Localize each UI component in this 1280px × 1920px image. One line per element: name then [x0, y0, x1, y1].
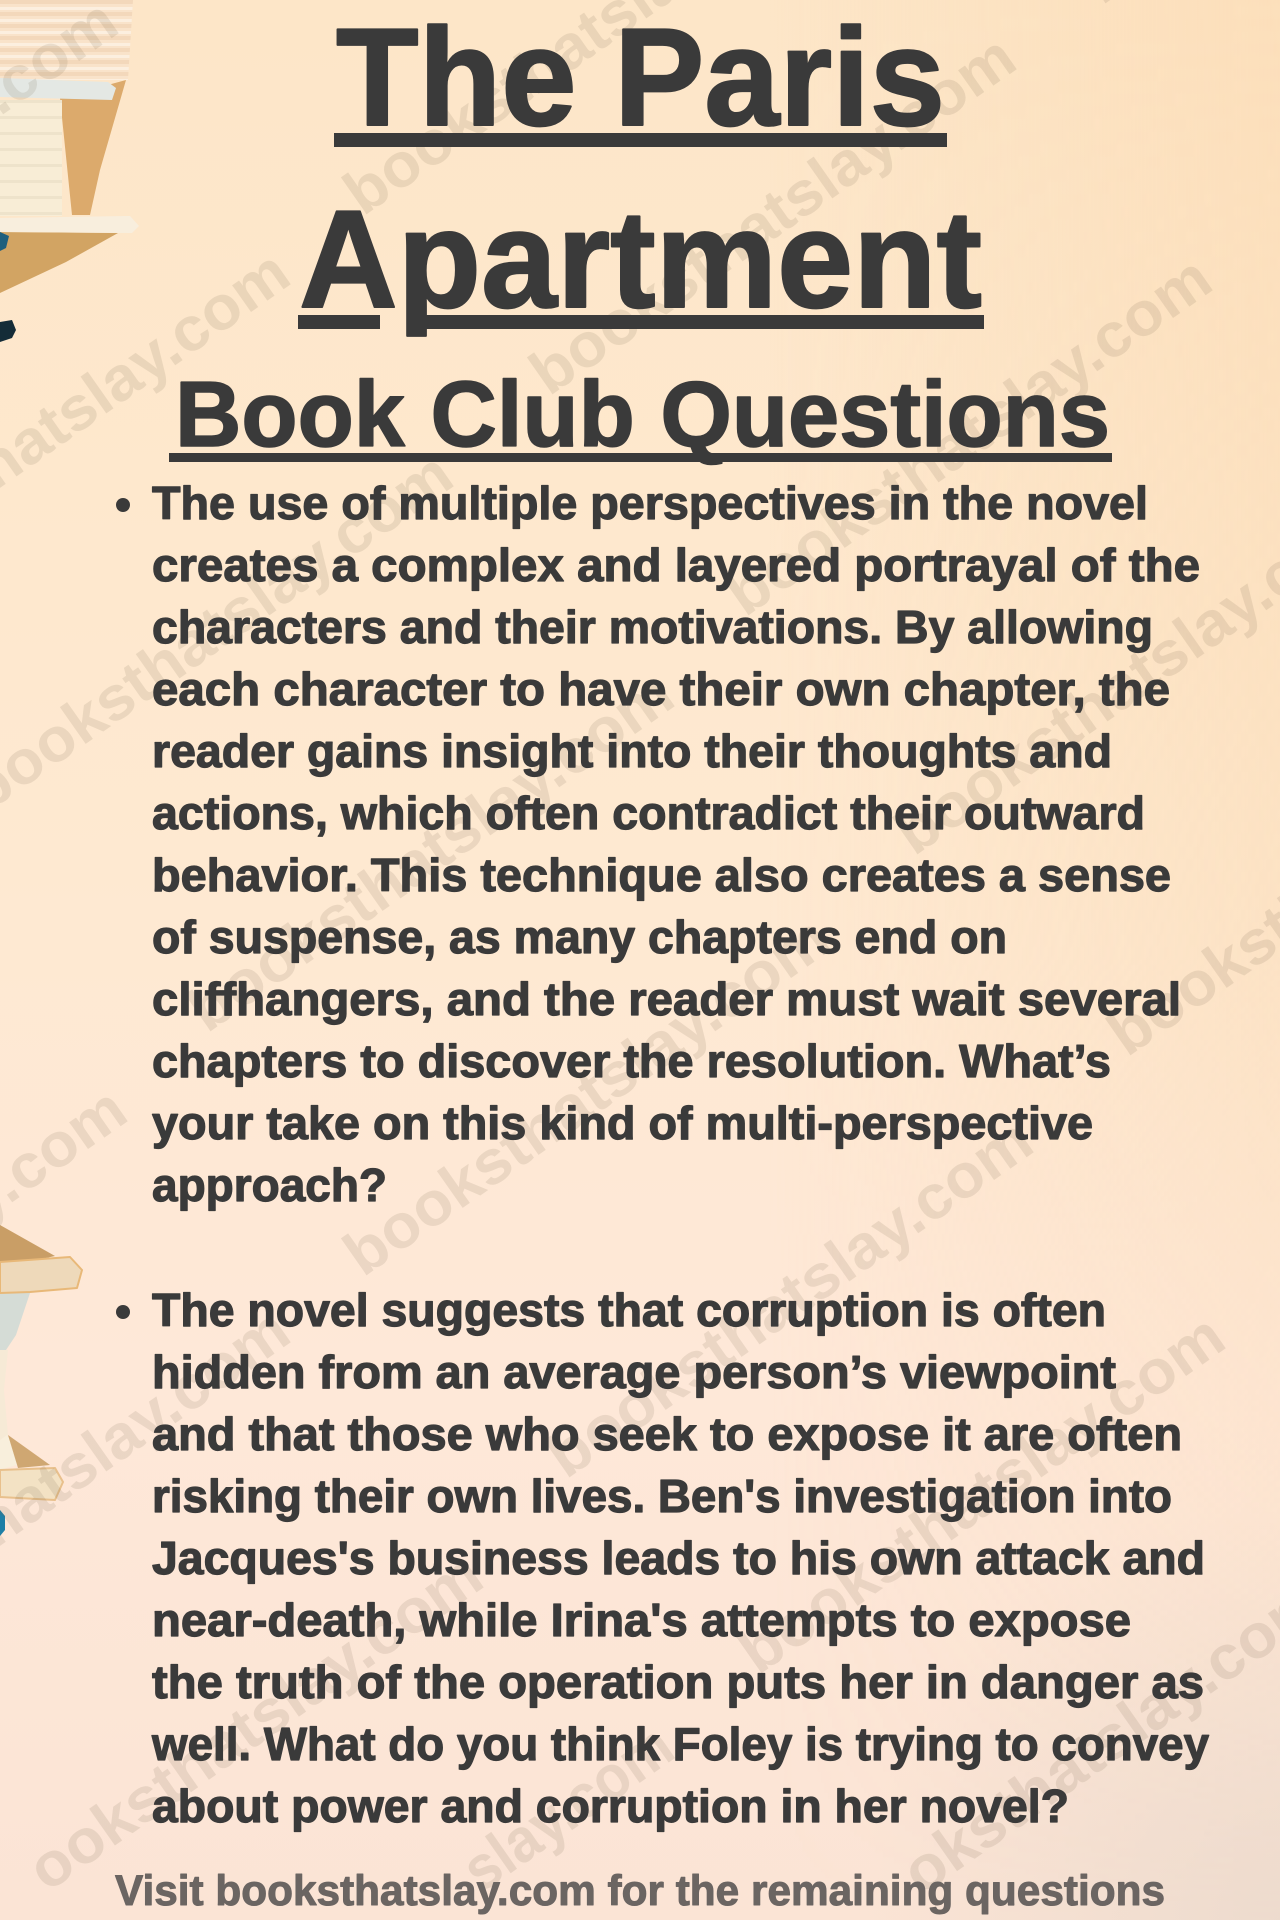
question 2 text: hidden from an average person’s viewpoint: [152, 1346, 1116, 1398]
question 1: [116, 477, 1200, 1211]
watermark pattern: booksthatslay.com: [517, 22, 1028, 408]
question 1 text: cliffhangers, and the reader must wait several: [152, 973, 1181, 1025]
bullet: [116, 498, 130, 512]
question 1 text: of suspense, as many chapters end on: [152, 911, 1007, 963]
watermark pattern: booksthatslay.com: [331, 903, 842, 1289]
question 1 text: each character to have their own chapter, the: [152, 663, 1170, 715]
decorative book stack, lower left: [0, 1225, 82, 1536]
question 1 text: creates a complex and layered portrayal of the: [152, 539, 1200, 591]
watermark pattern: ooksthatslay.com: [16, 1540, 495, 1904]
question 2 text: risking their own lives. Ben's investigation into: [152, 1470, 1172, 1522]
question 2 text: about power and corruption in her novel?: [152, 1780, 1069, 1832]
question 1 text: chapters to discover the resolution. What’s: [152, 1035, 1111, 1087]
question 2 text: the truth of the operation puts her in danger as: [152, 1656, 1204, 1708]
watermark pattern: booksthatslay.com: [175, 659, 686, 1045]
question 2 text: [151, 1284, 1209, 1832]
title line: The Paris: The Paris: [336, 0, 945, 155]
question 1 text: your take on this kind of multi-perspective: [152, 1097, 1093, 1149]
question 2 text: and that those who seek to expose it are often: [152, 1408, 1182, 1460]
question 1 text: characters and their motivations. By allowing: [152, 601, 1153, 653]
question 1 text: reader gains insight into their thoughts and: [152, 725, 1112, 777]
question 2 text: well. What do you think Foley is trying to convey: [151, 1718, 1209, 1770]
watermark pattern: booksthatslay.com: [726, 1301, 1237, 1687]
decorative book stack, top left: [0, 0, 139, 342]
watermark pattern: slay.com: [450, 1711, 686, 1905]
question 1 text: actions, which often contradict their outward: [152, 787, 1145, 839]
question 2 text: near-death, while Irina's attempts to expose: [152, 1594, 1131, 1646]
footer call to action: Visit booksthatslay.com for the remaining questions: [115, 1867, 1165, 1915]
question 2 text: The novel suggests that corruption is often: [152, 1284, 1106, 1336]
title line: Apartment: Apartment: [299, 182, 982, 337]
question 1 text: approach?: [152, 1159, 387, 1211]
question 2 text: Jacques's business leads to his own attack and: [152, 1532, 1205, 1584]
question 1 text: [152, 477, 1200, 1211]
bullet: [116, 1305, 130, 1319]
watermark pattern: booksthatslay.com: [534, 1105, 1045, 1491]
question 2: [116, 1284, 1209, 1832]
watermark pattern: booksthatslay.com: [713, 243, 1224, 629]
question 1 text: behavior. This technique also creates a sense: [152, 849, 1171, 901]
subtitle: Book Club Questions: Book Club Questions: [175, 362, 1110, 466]
title: [298, 0, 984, 337]
question 1 text: The use of multiple perspectives in the novel: [152, 477, 1148, 529]
